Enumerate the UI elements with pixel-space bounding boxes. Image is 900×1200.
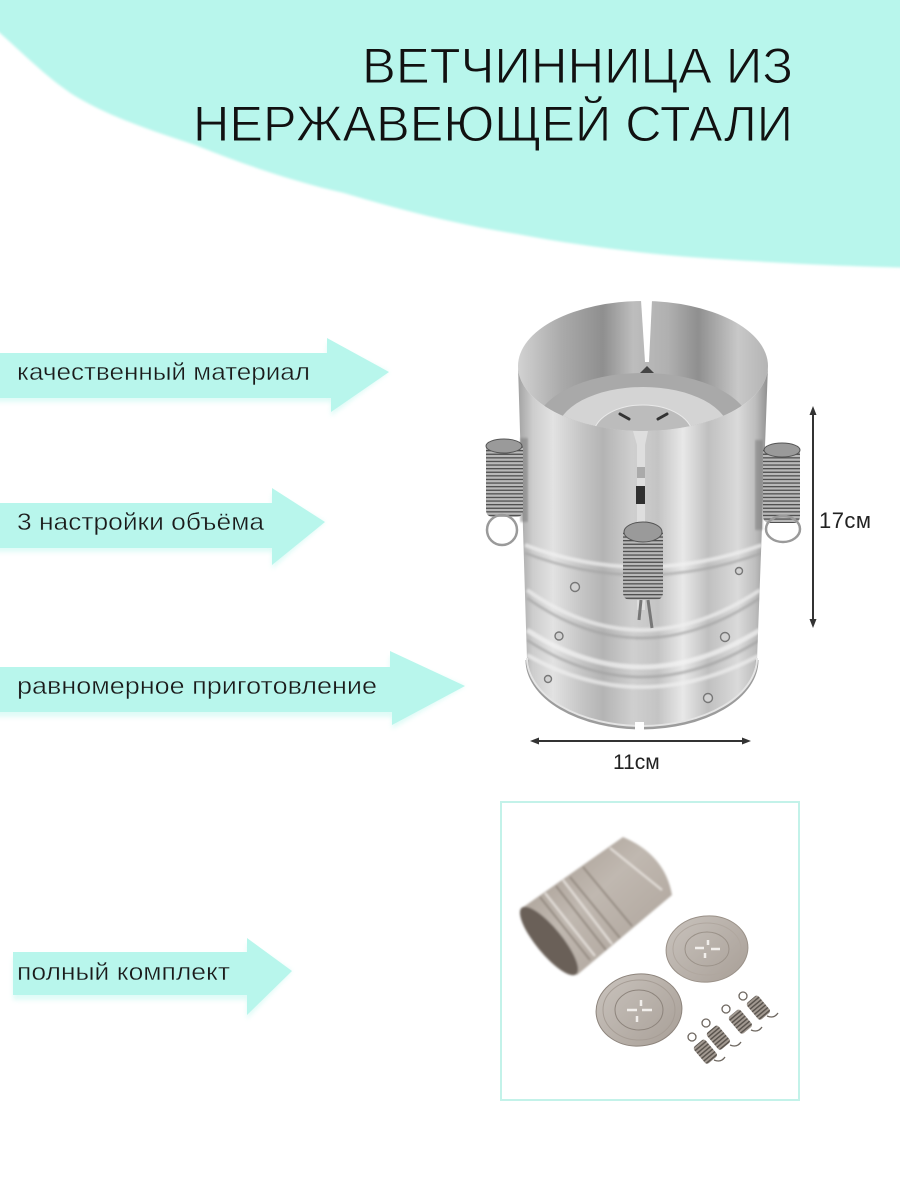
arrow label: full set	[13, 938, 292, 1019]
arrow label: quality material: качественный материал	[17, 359, 310, 386]
arrow label: quality material	[0, 338, 389, 416]
left spring	[486, 438, 528, 545]
part: cylinder	[512, 837, 672, 982]
arrow label: full set: полный комплект	[17, 959, 230, 986]
part: four springs	[688, 992, 778, 1065]
can interior	[518, 301, 768, 431]
can lower bands	[525, 545, 762, 687]
arrow label: even cooking: равномерное приготовление	[17, 673, 377, 700]
title	[193, 38, 793, 152]
arrow label: even cooking	[0, 651, 465, 729]
part: disc upper	[663, 912, 751, 986]
dimension: width: 11см	[613, 751, 660, 774]
arrow label: 3 volume settings: 3 настройки объёма	[17, 509, 265, 536]
inner discs	[544, 373, 742, 431]
background: mint header wave	[0, 0, 900, 268]
photo frame: full set parts	[501, 802, 799, 1100]
arrow label: 3 volume settings	[0, 488, 325, 569]
rivets	[544, 568, 742, 702]
top slit	[641, 300, 652, 362]
can body	[518, 366, 768, 728]
right spring	[755, 440, 800, 542]
can bottom rim	[527, 660, 757, 728]
dimension: width	[530, 738, 751, 774]
title: НЕРЖАВЕЮЩЕЙ СТАЛИ	[193, 95, 793, 152]
title: ВЕТЧИННИЦА ИЗ	[362, 38, 793, 94]
part: disc lower	[592, 970, 686, 1050]
centre spring	[623, 522, 663, 628]
product: steel ham press	[486, 300, 800, 731]
front slit	[633, 431, 648, 610]
dimension: height: 17см	[819, 508, 871, 533]
dimension: height	[810, 406, 871, 628]
